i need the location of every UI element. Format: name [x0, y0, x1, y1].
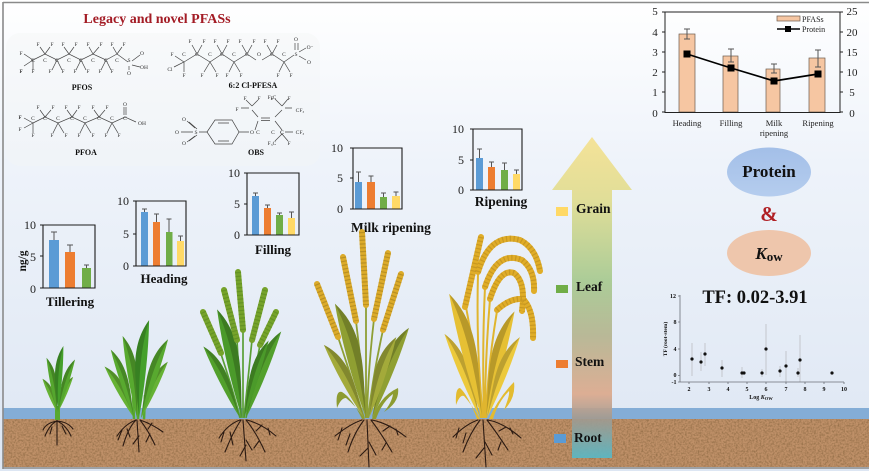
PFOA structure: FF: [18, 115, 22, 121]
6:2 Cl-PFESA structure: O⁻: [307, 45, 314, 51]
wheat ears: [317, 232, 401, 337]
wheat ears: [203, 272, 276, 353]
chart: PFASs and protein: 0: [849, 108, 855, 120]
PFOS structure: [19, 42, 148, 77]
chart: TF against log Kow: 8: [804, 387, 806, 393]
PFOA structure: O: [123, 102, 127, 108]
chart: TF against log Kow: 2: [688, 387, 690, 393]
title: Legacy and novel PFASs: [83, 12, 231, 27]
legend: stem: Stem: [575, 354, 605, 369]
6:2 Cl-PFESA structure: CCCCCCOCCS: [182, 52, 298, 58]
chart: TF against log Kow: -1: [672, 380, 676, 386]
chart: PFASs and protein: 4: [652, 27, 658, 39]
chart: heading bars: 0: [123, 259, 129, 273]
OBS structure: [175, 95, 304, 147]
chart: filling bars: 5: [234, 197, 240, 211]
chart: filling bars: 0: [234, 228, 240, 242]
chart: filling bars: [228, 166, 299, 257]
milk ripening label: Milk ripening: [351, 220, 431, 235]
PFOS structure: O: [127, 71, 131, 77]
plant: ripening: [444, 237, 540, 467]
water band: [3, 408, 869, 419]
chart: ripening bars: 5: [458, 153, 464, 167]
6:2 Cl-PFESA structure: FFFFFFF: [182, 73, 293, 79]
chart: PFASs and protein: 1: [652, 87, 658, 99]
x axis title: OW: [765, 396, 773, 401]
chart: PFASs and protein: 3: [652, 47, 658, 59]
Kow ellipse: [727, 230, 811, 276]
OBS label: OBS: [248, 148, 265, 157]
chart: tillering bars: 5: [30, 250, 36, 264]
chart: milk ripening bars: 5: [337, 171, 343, 185]
chart: tillering bars: 0: [30, 282, 36, 296]
OBS structure: O: [182, 117, 186, 123]
OBS structure: F₃C: [268, 141, 277, 147]
PFOA structure: OH: [138, 121, 146, 127]
arrow: upward transport: [552, 137, 632, 458]
chart legend: PFASs: [802, 15, 824, 24]
Kow ellipse: K: [754, 244, 768, 263]
legend: stem: [556, 354, 605, 369]
chart: heading bars: [117, 194, 188, 286]
chart: heading bars: 5: [123, 227, 129, 241]
chart: PFASs and protein: Milk: [766, 118, 783, 128]
6:2 Cl-PFESA structure: [167, 37, 314, 79]
6:2 Cl-PFESA structure: FFFFFFFF: [188, 39, 280, 45]
chart: PFASs and protein: 5: [652, 6, 658, 18]
chart: PFASs and protein: 15: [846, 47, 858, 59]
chart: TF against log Kow: 8: [674, 320, 676, 326]
OBS structure: CF₃: [296, 108, 304, 114]
chart: PFASs and protein: ripening: [760, 128, 789, 138]
PFOS structure: FFFFFFFFF: [19, 69, 114, 75]
legend: grain: [556, 201, 611, 216]
protein line: [684, 50, 822, 84]
plant: filling: [203, 272, 281, 461]
heading label: Heading: [141, 271, 188, 286]
chart: PFASs and protein: [652, 6, 858, 138]
chart: ripening bars: [452, 122, 528, 209]
OBS structure: CF₃: [296, 130, 304, 136]
OBS structure: F₃C: [268, 95, 277, 101]
curled lower leaves: [456, 388, 480, 419]
PFOA structure: F: [18, 127, 22, 133]
TF range: TF: 0.02-3.91: [702, 288, 808, 308]
protein ellipse: [727, 148, 811, 196]
chart: TF against log Kow: 4: [726, 387, 730, 393]
PFOA structure: [18, 102, 146, 139]
6:2 Cl-PFESA structure: O: [294, 37, 298, 43]
filling label: Filling: [255, 242, 292, 257]
OBS structure: FFFF: [243, 96, 291, 102]
soil: [3, 419, 869, 467]
chart: PFASs and protein: 20: [846, 27, 858, 39]
PFOS structure: FO: [19, 51, 144, 57]
6:2 Cl-PFESA structure: O: [307, 60, 311, 66]
chart: TF against log Kow: 12: [670, 294, 676, 300]
chart: TF against log Kow: 7: [784, 387, 788, 393]
x axis title: Log K: [749, 395, 765, 401]
ampersand: &: [760, 202, 778, 226]
chart: PFASs and protein: 10: [846, 67, 858, 79]
y axis title: TF (root-stem): [662, 322, 669, 356]
chart: milk ripening bars: 0: [337, 202, 343, 216]
PFOS structure: CCCCCCCCS: [31, 58, 131, 64]
rice ears: [465, 237, 540, 338]
chart: TF against log Kow: 10: [841, 387, 847, 393]
chart: TF against log Kow: 0: [674, 373, 676, 379]
6:2 Cl-PFESA structure: Cl: [167, 67, 173, 73]
chart: PFASs and protein: Filling: [720, 118, 743, 128]
chart: tillering bars: 10: [24, 218, 36, 232]
chart: milk ripening bars: 10: [331, 141, 343, 155]
chart: PFASs and protein: Heading: [673, 118, 702, 128]
legend: root: [554, 430, 602, 445]
legend: grain: Grain: [576, 201, 611, 216]
chart: PFASs and protein: 2: [652, 67, 658, 79]
PFOS label: PFOS: [72, 83, 93, 92]
chart: TF against log Kow: 3: [708, 387, 710, 393]
PFOA structure: CCCCCCCC: [31, 116, 127, 122]
legend: root: Root: [574, 430, 602, 445]
chart: filling bars: 10: [228, 166, 240, 180]
chart legend: Protein: [802, 25, 825, 34]
chart: PFASs and protein: 5: [849, 87, 855, 99]
plant: heading: [105, 320, 168, 452]
chart: ripening bars: 10: [452, 122, 464, 136]
chart: TF against log Kow: 4: [674, 347, 676, 353]
PFOS structure: OH: [140, 65, 148, 71]
PFOA structure: FFFFFF: [36, 105, 109, 111]
6:2 Cl-PFESA structure: F: [170, 52, 174, 58]
OBS structure: F: [287, 141, 291, 147]
PFOA label: PFOA: [75, 148, 97, 157]
6:2 Cl-PFESA label: 6:2 Cl-PFESA: [229, 81, 278, 90]
chart: tillering bars: [17, 218, 95, 309]
legend: leaf: [556, 279, 603, 294]
chart: TF against log Kow: 9: [822, 387, 826, 393]
chart: PFASs and protein: Ripening: [802, 118, 834, 128]
chart legend: [777, 15, 825, 34]
OBS structure: O: [182, 141, 186, 147]
chart: PFASs and protein: 25: [846, 6, 858, 18]
OBS structure: OCCCCSO: [175, 130, 284, 136]
y axis unit: ng/g: [17, 250, 29, 272]
plant: tillering: [42, 346, 75, 445]
tillering label: Tillering: [46, 294, 95, 309]
protein ellipse: Protein: [742, 162, 796, 181]
chart: heading bars: 10: [117, 194, 129, 208]
chart: TF against log Kow: [662, 294, 847, 401]
chart: PFASs and protein: 0: [652, 108, 658, 120]
chart: milk ripening bars: [331, 141, 431, 235]
plant: milk ripening: [317, 232, 409, 467]
panel: PFAS chemical structures: [6, 33, 320, 166]
chart: TF against log Kow: 5: [746, 387, 748, 393]
curled lower leaves: [337, 392, 365, 419]
Kow ellipse: ow: [767, 249, 783, 264]
PFOA structure: FFFFFFF: [31, 133, 121, 139]
legend: leaf: Leaf: [576, 279, 603, 294]
chart: TF against log Kow: 6: [764, 387, 768, 393]
chart: ripening bars: 0: [458, 183, 464, 197]
OBS structure: F: [235, 107, 239, 113]
PFOS structure: FFFFFFFF: [36, 42, 126, 48]
ripening label: Ripening: [475, 194, 528, 209]
